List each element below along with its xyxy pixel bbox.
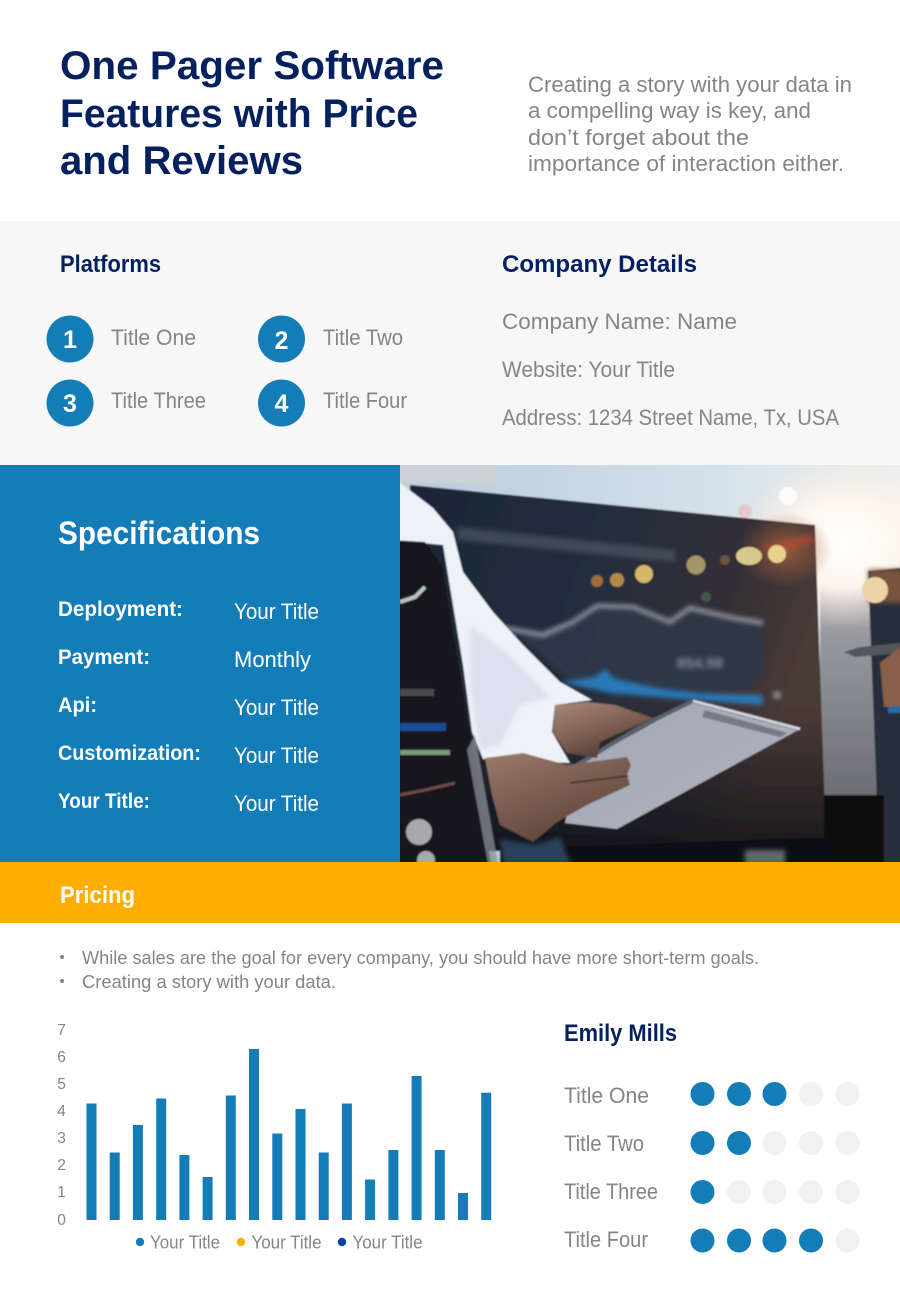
platform 1 <box>46 316 196 362</box>
band: pricing <box>0 862 900 923</box>
legend: Your Title <box>252 1232 322 1252</box>
panel: Emily Mills ratings <box>564 1020 860 1252</box>
heading: specifications: Specifications <box>58 515 260 551</box>
y axis labels: 6 <box>57 1049 66 1066</box>
spec values: Your Title <box>234 743 319 768</box>
intro text: importance of interaction either. <box>528 151 844 176</box>
main monitor <box>400 485 826 851</box>
platform 2: Title Two <box>323 325 403 350</box>
bokeh lights <box>591 487 888 603</box>
legend <box>136 1232 423 1252</box>
title <box>60 44 444 183</box>
intro text: Creating a story with your data in <box>528 72 852 97</box>
y axis labels: 3 <box>57 1130 66 1147</box>
upper hand <box>553 702 653 758</box>
pricing bullets <box>60 948 759 992</box>
spec values: Your Title <box>234 791 319 816</box>
pricing bullets: While sales are the goal for every company, you should have more short-term goals. <box>82 948 759 968</box>
shirt sleeve <box>390 475 592 763</box>
company details text: Website: Your Title <box>502 357 675 382</box>
y axis labels: 0 <box>57 1212 66 1229</box>
tablet <box>565 701 800 829</box>
spec labels: Your Title: <box>58 790 150 813</box>
bar chart <box>57 1022 491 1252</box>
platform 2 <box>258 316 403 362</box>
right monitor <box>868 567 900 875</box>
rating: title three <box>564 1179 860 1204</box>
intro text: don’t forget about the <box>528 125 749 150</box>
sleeve below <box>498 836 574 862</box>
panel: platforms and company details <box>0 221 900 465</box>
title: and Reviews <box>60 139 303 183</box>
legend: Your Title <box>150 1232 220 1252</box>
rating: title two <box>564 1131 860 1156</box>
y axis labels: 1 <box>57 1184 66 1201</box>
spec values <box>234 599 319 816</box>
legend: Your Title <box>352 1232 422 1252</box>
chart on monitor <box>457 527 781 705</box>
right side background <box>818 588 878 796</box>
y axis labels <box>57 1022 66 1229</box>
spec labels: Api: <box>58 694 97 717</box>
title: One Pager Software <box>60 44 444 88</box>
platform 3 <box>46 380 206 426</box>
intro text <box>528 72 852 176</box>
platform 4: Title Four <box>323 388 407 413</box>
spec labels: Customization: <box>58 742 201 765</box>
y axis labels: 4 <box>57 1103 66 1120</box>
intro text: a compelling way is key, and <box>528 98 811 123</box>
spec labels: Payment: <box>58 646 150 669</box>
y axis labels: 2 <box>57 1157 66 1174</box>
company details text: Address: 1234 Street Name, Tx, USA <box>502 405 839 430</box>
spec labels: Deployment: <box>58 598 183 621</box>
title: Features with Price <box>60 92 418 136</box>
company details text: Company Name: Name <box>502 309 737 334</box>
heading: Emily Mills: Emily Mills <box>564 1020 677 1047</box>
photo: hands holding a tablet in front of chart monitors <box>390 455 900 875</box>
rating: title four <box>564 1227 860 1252</box>
rating: title one: Title One <box>564 1083 649 1108</box>
platform 4: 4 <box>275 390 289 418</box>
platform 3: Title Three <box>111 388 206 413</box>
bottom dark strip <box>823 794 884 862</box>
panel: specifications <box>0 465 400 863</box>
band: pricing: Pricing <box>60 882 135 909</box>
foreground device <box>400 540 492 862</box>
platform 3: 3 <box>63 390 77 418</box>
pricing bullets: Creating a story with your data. <box>82 972 336 992</box>
rating: title two: Title Two <box>564 1131 644 1156</box>
y axis labels: 5 <box>57 1076 66 1093</box>
spec values: Monthly <box>234 647 311 672</box>
rating: title one <box>564 1082 860 1108</box>
platform 1: Title One <box>111 325 196 350</box>
pen and fingers at right <box>844 643 900 657</box>
heading: platforms: Platforms <box>60 251 161 278</box>
platform 2: 2 <box>275 327 288 355</box>
spec values: Your Title <box>234 695 319 720</box>
y axis labels: 7 <box>57 1022 66 1039</box>
platform 1: 1 <box>63 326 77 354</box>
rating: title four: Title Four <box>564 1227 648 1252</box>
spec labels <box>58 598 201 813</box>
bars <box>86 1049 491 1220</box>
heading: company details: Company Details <box>502 251 697 278</box>
spec values: Your Title <box>234 599 319 624</box>
lower hand <box>485 753 631 842</box>
rating: title three: Title Three <box>564 1179 658 1204</box>
chart on monitor: 854.59 <box>677 655 723 672</box>
company details text <box>502 309 839 430</box>
platform 4 <box>258 380 407 426</box>
